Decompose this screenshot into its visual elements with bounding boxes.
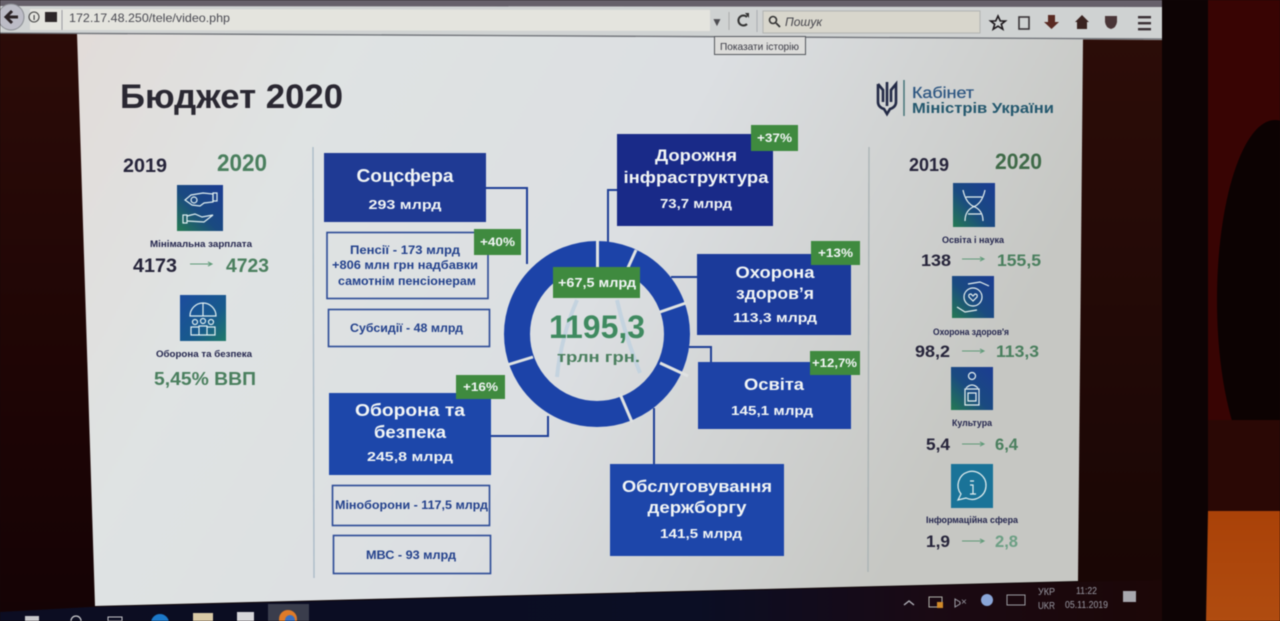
system tray: 05.11.2019 [1065,600,1108,611]
panel: road infrastructure: Дорожня [655,146,737,165]
system tray: 11:22 [1076,586,1097,597]
address bar [29,10,757,32]
tag: +40% [474,229,521,255]
dividers [313,147,314,578]
education values: 155,5 [997,251,1041,270]
panel: subsidies: Субсидії - 48 млрд [350,323,464,335]
healthcare values [915,342,1039,361]
tag: +16%: +16% [463,380,498,394]
total increase tag [553,267,640,298]
tooltip: Показати історію [720,41,799,53]
panel: debt service [610,464,784,556]
panel: subsidies [328,310,490,346]
label: defence and security: Оборона та безпека [156,349,253,359]
left column [123,150,269,389]
toolbar icons [991,15,1151,30]
total budget: трлн грн. [557,349,640,366]
panel: social sphere: Соцсфера [356,166,455,186]
year headers [123,150,267,177]
value: share of GDP: 5,45% ВВП [154,369,256,389]
system tray [904,586,1136,612]
minimum wage values [133,256,269,277]
year headers: 2020 [217,150,267,177]
icon: info speech bubble [951,464,993,508]
address bar: 172.17.48.250/tele/video.php [69,11,230,25]
culture values [926,435,1019,454]
panel: social sphere [324,153,486,222]
label: healthcare: Охорона здоров'я [933,327,1009,337]
education values [921,251,1041,270]
panel: defence and security: безпека [374,422,446,442]
year headers: 2020 [995,149,1042,174]
panel: healthcare: 113,3 млрд [733,310,818,325]
tag: +37%: +37% [757,131,792,145]
minimum wage values: 4173 [133,256,177,277]
panel: social sphere: 293 млрд [368,197,442,212]
back button [0,4,24,30]
system tray: UKR [1038,601,1055,612]
tag: +40%: +40% [480,235,515,249]
panel: debt service: Обслуговування [622,477,772,496]
panel: ministry of defence: Міноборони - 117,5 млрд [335,500,489,512]
panel: debt service: 141,5 млрд [660,526,743,541]
culture values: 6,4 [995,435,1019,454]
icon: umbrella protecting people [180,295,226,341]
minimum wage values: 4723 [226,256,269,277]
connector lines [486,188,711,464]
panel: road infrastructure [617,125,798,226]
panel: defence and security: 245,8 млрд [367,449,454,464]
panel: road infrastructure: інфраструктура [624,168,769,187]
address bar: ▼ [711,15,723,29]
tag: +37% [751,125,798,151]
right column [909,149,1042,551]
year headers [909,149,1042,175]
taskbar [0,580,1162,621]
healthcare values: 113,3 [996,342,1039,361]
logo text [912,85,1054,117]
icon: bust statue [951,367,993,410]
search box: Пошук [785,15,823,29]
panel: defence and security: Оборона та [355,400,465,420]
panel: education: 145,1 млрд [731,403,814,418]
system tray: УКР [1038,587,1055,598]
year headers: 2019 [909,155,949,175]
icon: DNA [953,183,995,227]
panel: healthcare: здоров’я [736,284,814,303]
panel: healthcare: Охорона [736,263,815,282]
label: information sphere: Інформаційна сфера [926,515,1019,525]
icon: hands with heart [952,276,994,318]
logo: Cabinet of Ministers of Ukraine [878,80,1054,117]
panel: education: Освіта [744,375,805,394]
tag: +16% [456,375,505,399]
panel: debt service: держборгу [648,498,747,517]
tooltip [714,36,806,54]
healthcare values: 98,2 [915,342,950,361]
total increase tag: +67,5 млрд [558,275,637,290]
panel: pensions: +806 млн грн надбавки [332,260,478,272]
taskbar app icons [25,604,309,621]
panel: pensions: самотнім пенсіонерам [338,276,476,288]
information sphere values [926,532,1018,551]
panel: pensions [327,229,521,298]
label: culture: Культура [952,418,993,428]
education values: 138 [921,251,951,270]
information sphere values: 2,8 [995,532,1018,551]
total budget [549,309,645,366]
panel: healthcare [697,241,860,335]
total budget: 1195,3 [549,309,645,345]
tag: +13%: +13% [818,246,853,260]
panel: ministry of defence [332,486,490,526]
donut chart [507,240,688,422]
slide [77,33,1083,606]
information sphere values: 1,9 [926,532,950,551]
panel: defence and security [329,375,505,475]
browser toolbar [0,0,1162,40]
title: Бюджет 2020 [120,78,343,116]
label: education and science: Освіта і наука [942,235,1005,245]
logo text: Кабінет [912,85,975,102]
panel: interior ministry [334,536,490,574]
panel: road infrastructure: 73,7 млрд [660,196,733,211]
search box [763,11,980,33]
icon: trident [878,82,896,114]
panel: education [698,351,860,429]
system tray: × [961,597,967,608]
culture values: 5,4 [926,435,951,454]
icon: handshake giving hands [177,185,223,231]
label: minimum wage: Мінімальна зарплата [150,239,253,249]
panel: interior ministry: МВС - 93 млрд [366,550,457,562]
tag: +12,7%: +12,7% [812,356,857,370]
year headers: 2019 [123,156,167,177]
logo text: Міністрів України [912,100,1054,117]
tag: +12,7% [810,351,860,375]
tag: +13% [811,241,860,265]
panel: pensions: Пенсії - 173 млрд [350,245,461,257]
